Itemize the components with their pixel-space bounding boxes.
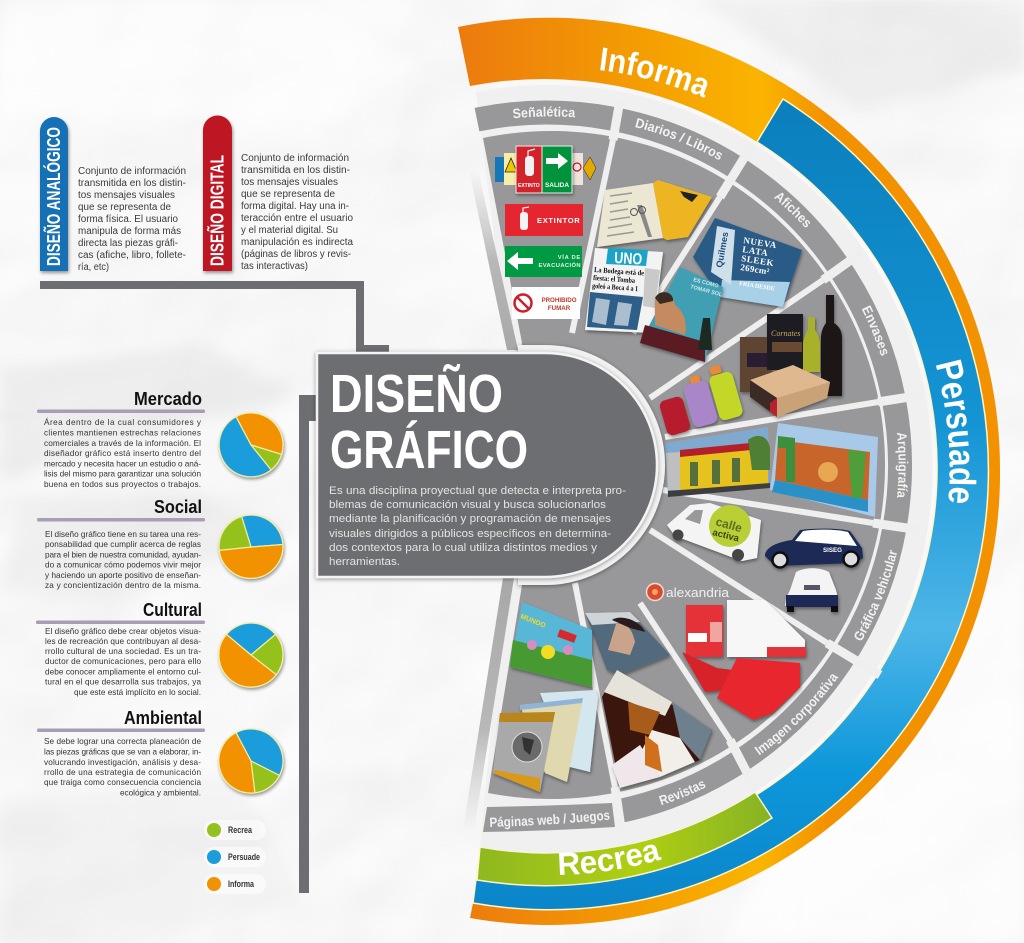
text: social: para el bien de nuestra comunidad, ayudan- [45, 550, 201, 560]
label: gráfica vehicular: Gráfica vehicular [854, 550, 897, 640]
text: cultural: El diseño gráfico debe crear objetos visua- [45, 627, 201, 636]
sign: extintor salida: EXTINTO [518, 183, 540, 189]
text: ambiental [44, 737, 201, 798]
text: social: za y concientización dentro de la misma. [45, 581, 201, 590]
heading: mercado: Mercado [134, 389, 202, 409]
newspaper UNO: fiesta: el Tomba [593, 273, 636, 285]
text: analógico description: Conjunto de información [78, 166, 186, 177]
sign: vía de evacuación: EVACUACIÓN [538, 261, 581, 269]
band: recrea: Recrea [559, 844, 662, 875]
text: cultural: ductor de comunicaciones, pero para ello [45, 657, 201, 666]
game screenshot [510, 602, 592, 687]
title [330, 364, 528, 480]
tab: diseño analógico [40, 117, 68, 271]
vehicle: calle activa van: calle [714, 514, 744, 535]
sector: arquigrafía [665, 423, 878, 517]
legend: Informa [228, 879, 255, 889]
text: cultural: rrollo cultural de una sociedad. Es un tra- [45, 647, 201, 656]
open book [597, 180, 712, 247]
logo: alexandria: alexandria [666, 585, 730, 600]
poster: nueva lata sleek: SLEEK [741, 253, 775, 268]
wine, oil and packs: Cornates [771, 329, 800, 338]
text: mercado [44, 417, 202, 489]
definition text: Es una disciplina proyectual que detecta e interpreta pro- [329, 485, 626, 497]
text: analógico description: directa las piezas gráfi- [78, 238, 178, 249]
text: ambiental: volucrando investigación, análisis y desa- [44, 758, 201, 767]
tab: diseño digital: DISEÑO DIGITAL [206, 155, 228, 266]
sign: extintor salida [516, 146, 572, 193]
text: analógico description: ría, etc) [78, 262, 109, 273]
browser windows [493, 690, 598, 792]
sector: diarios y libros [585, 180, 712, 333]
heading: ambiental: Ambiental [124, 708, 202, 728]
text: mercado: mercado y necesita hacer un estudio o aná- [44, 460, 201, 468]
panel: mercado [37, 389, 283, 489]
label: arquigrafía: Arquigrafía [895, 432, 908, 498]
text: social: El diseño gráfico tiene en su tarea una res- [45, 530, 201, 539]
sign: prohibido fumar [512, 287, 580, 319]
photo: yellow building [665, 427, 770, 497]
panel: diseño gráfico [317, 353, 657, 577]
text: digital description: (páginas de libros y revis- [241, 249, 351, 260]
text: analógico description: que se representa de [78, 202, 172, 213]
poster: nueva lata sleek: LATA [742, 244, 769, 258]
pie chart: ambiental [219, 729, 283, 793]
poster: nueva lata sleek: 269cm² [740, 262, 770, 277]
text: digital description: forma digital. Hay una in- [241, 201, 349, 212]
panel: diseño digital [203, 116, 354, 272]
text: digital description: tas interactivas) [241, 261, 308, 272]
text: digital description: Conjunto de información [241, 153, 349, 164]
text: analógico description: cas (afiche, libro, follete- [78, 250, 186, 261]
text: analógico description [78, 166, 186, 273]
logo: alexandria [646, 584, 730, 600]
definition text: herramientas. [329, 556, 400, 568]
wine, oil and packs [740, 295, 842, 417]
tab: diseño analógico: DISEÑO ANALÓGICO [43, 127, 64, 266]
text: cultural: les de recreación que contribuyan al desa- [45, 637, 201, 646]
text: analógico description: forma física. El usuario [78, 214, 179, 225]
text: digital description: que se representa de [241, 189, 336, 200]
stationery [682, 600, 806, 720]
text: ambiental: Se debe lograr una correcta planeación de [44, 737, 201, 746]
sector: páginas web y juegos [493, 602, 598, 792]
text: digital description: y el material digital. Su [241, 225, 338, 236]
text: cultural [45, 627, 201, 697]
definition text: dos contextos para lo cual utiliza distintos medios y [329, 542, 598, 554]
label: revistas: Revistas [659, 781, 706, 806]
sign: vía de evacuación [505, 246, 582, 277]
vehicle: siseg car [765, 529, 863, 568]
newspaper UNO: UNO [614, 250, 643, 268]
panel: social [37, 497, 283, 590]
text: social: ponsabilidad que cumplir acerca de reglas [45, 540, 201, 549]
tab: diseño digital [203, 116, 232, 271]
vehicle: calle activa van: activa [711, 527, 741, 545]
label: señalética: Señalética [513, 106, 576, 118]
sign: extintor salida: SALIDA [545, 182, 569, 189]
text: ambiental: ecológica y ambiental. [120, 788, 201, 798]
legend: Persuade [228, 852, 260, 862]
band: informa: Informa [600, 48, 708, 98]
band: recrea [476, 792, 773, 886]
text: ambiental: las piezas gráficas que se van a elaborar, in- [44, 748, 201, 756]
poster: beer with people [640, 267, 723, 362]
text: social: y haciendo un aporte positivo de enseñan- [45, 571, 201, 580]
sector: afiches [640, 218, 802, 362]
game screenshot: MUNDO [519, 613, 547, 630]
left edge strips [463, 170, 518, 830]
definition text: blemas de comunicación visual y busca solucionarlos [329, 499, 607, 511]
text: digital description: manipulación es indirecta [241, 237, 354, 248]
text: analógico description: manipula de forma más [78, 226, 181, 237]
sign: prohibido fumar: FUMAR [548, 305, 571, 312]
newspaper UNO [585, 248, 663, 333]
label: imagen corporativa: Imagen corporativa [754, 674, 838, 756]
sector: imagen corporativa [646, 584, 806, 720]
label: diarios / libros: Diarios / Libros [635, 118, 722, 160]
sign: prohibido fumar: PROHIBIDO [541, 297, 577, 304]
text: cultural: que este está implícito en lo social. [74, 688, 201, 697]
text: cultural: tural en el que desarrolla sus trabajos, ya [45, 678, 201, 686]
divider: social [37, 518, 205, 522]
text: mercado: Área dentro de la cual consumidores y [44, 417, 202, 427]
vehicle: calle activa van [667, 503, 761, 561]
magazine with woman [585, 612, 670, 675]
panel: cultural [36, 600, 283, 697]
band: persuade: Persuade [936, 360, 976, 503]
poster: nueva lata sleek: Quilmes [714, 231, 730, 268]
heading: social: Social [154, 497, 202, 517]
sector: gráfica vehicular [667, 503, 863, 612]
label: envases: Envases [862, 305, 888, 356]
heading: cultural: Cultural [143, 600, 202, 620]
divider: ambiental [37, 728, 205, 732]
text: mercado: diseñador gráfico está inserto dentro del [44, 449, 201, 458]
text: digital description: transmitida en los distin- [241, 165, 350, 176]
text: social: do a comunicar cómo podemos vivir mejor [45, 560, 201, 570]
spokes [572, 100, 922, 835]
sign: extintor [505, 204, 583, 236]
center ring [518, 345, 665, 585]
gray sector fan [483, 131, 885, 799]
divider: mercado [37, 410, 205, 413]
definition text: visuales dirigidos a públicos específicos en determina- [329, 528, 611, 540]
legend: Recrea [228, 825, 253, 835]
text: cultural: debe conocer ampliamente el entorno cul- [45, 668, 201, 676]
poster: beer with people: ES COMO [692, 277, 720, 290]
label band: páginas web [483, 803, 615, 832]
sector: revistas [585, 612, 712, 788]
text: mercado: comerciales a través de la información. El [44, 439, 201, 448]
text: ambiental: rrollo de una estrategia de comunicación [44, 768, 201, 777]
newspaper UNO: La Bodega está de [594, 265, 645, 278]
text: digital description [241, 153, 354, 272]
sign: extintor: EXTINTOR [537, 216, 580, 225]
poster: nueva lata sleek: FRÍA DESDE [739, 279, 775, 293]
title: GRÁFICO [330, 420, 528, 480]
poster: nueva lata sleek: NUEVA [743, 235, 778, 250]
gatorade bottles [659, 365, 744, 437]
label ring [477, 113, 900, 812]
sector: envases [659, 295, 842, 437]
pie chart: cultural [219, 623, 283, 687]
poster: beer with people: TOMAR SOL [689, 284, 723, 299]
text: ambiental: que traiga como consecuencia conciencia [44, 778, 201, 787]
magazine spread [602, 670, 712, 788]
poster: nueva lata sleek [693, 218, 802, 307]
fan backing [476, 85, 933, 853]
text: digital description: teracción entre el usuario [241, 213, 354, 224]
sector labels [490, 106, 908, 830]
legend [204, 820, 266, 894]
photo: green and orange facade [770, 423, 878, 517]
text: mercado: buena en todos sus proyectos o trabajos. [44, 480, 201, 489]
label: afiches: Afiches [774, 192, 810, 228]
definition text: mediante la planificación y programación de mensajes [329, 513, 612, 525]
text: social [45, 530, 201, 590]
vehicle: siseg car: SISEG [823, 547, 842, 554]
text: digital description: tos mensajes visuales [241, 177, 338, 188]
panel: diseño analógico [40, 117, 186, 273]
panel: ambiental [37, 708, 283, 798]
vehicle: rear car [785, 568, 838, 612]
text: analógico description: transmitida en los distin- [78, 178, 186, 189]
text: mercado: clientes mantienen estrechas relaciones [44, 428, 201, 438]
title: DISEÑO [330, 364, 503, 424]
divider: cultural [36, 620, 205, 624]
newspaper UNO: goleó a Boca 4 a 1 [592, 281, 639, 293]
connector lines [40, 281, 389, 893]
sector: señalética signs [495, 146, 596, 319]
pie chart: social [219, 515, 283, 578]
text: mercado: lisis del mismo para garantizar una solución [44, 470, 201, 478]
definition text [329, 485, 626, 568]
sign: vía de evacuación: VÍA DE [558, 253, 581, 261]
label: páginas web / juegos: Páginas web / Juegos [490, 812, 610, 830]
pie chart: mercado [219, 413, 283, 477]
text: analógico description: tos mensajes visuales [78, 190, 175, 201]
